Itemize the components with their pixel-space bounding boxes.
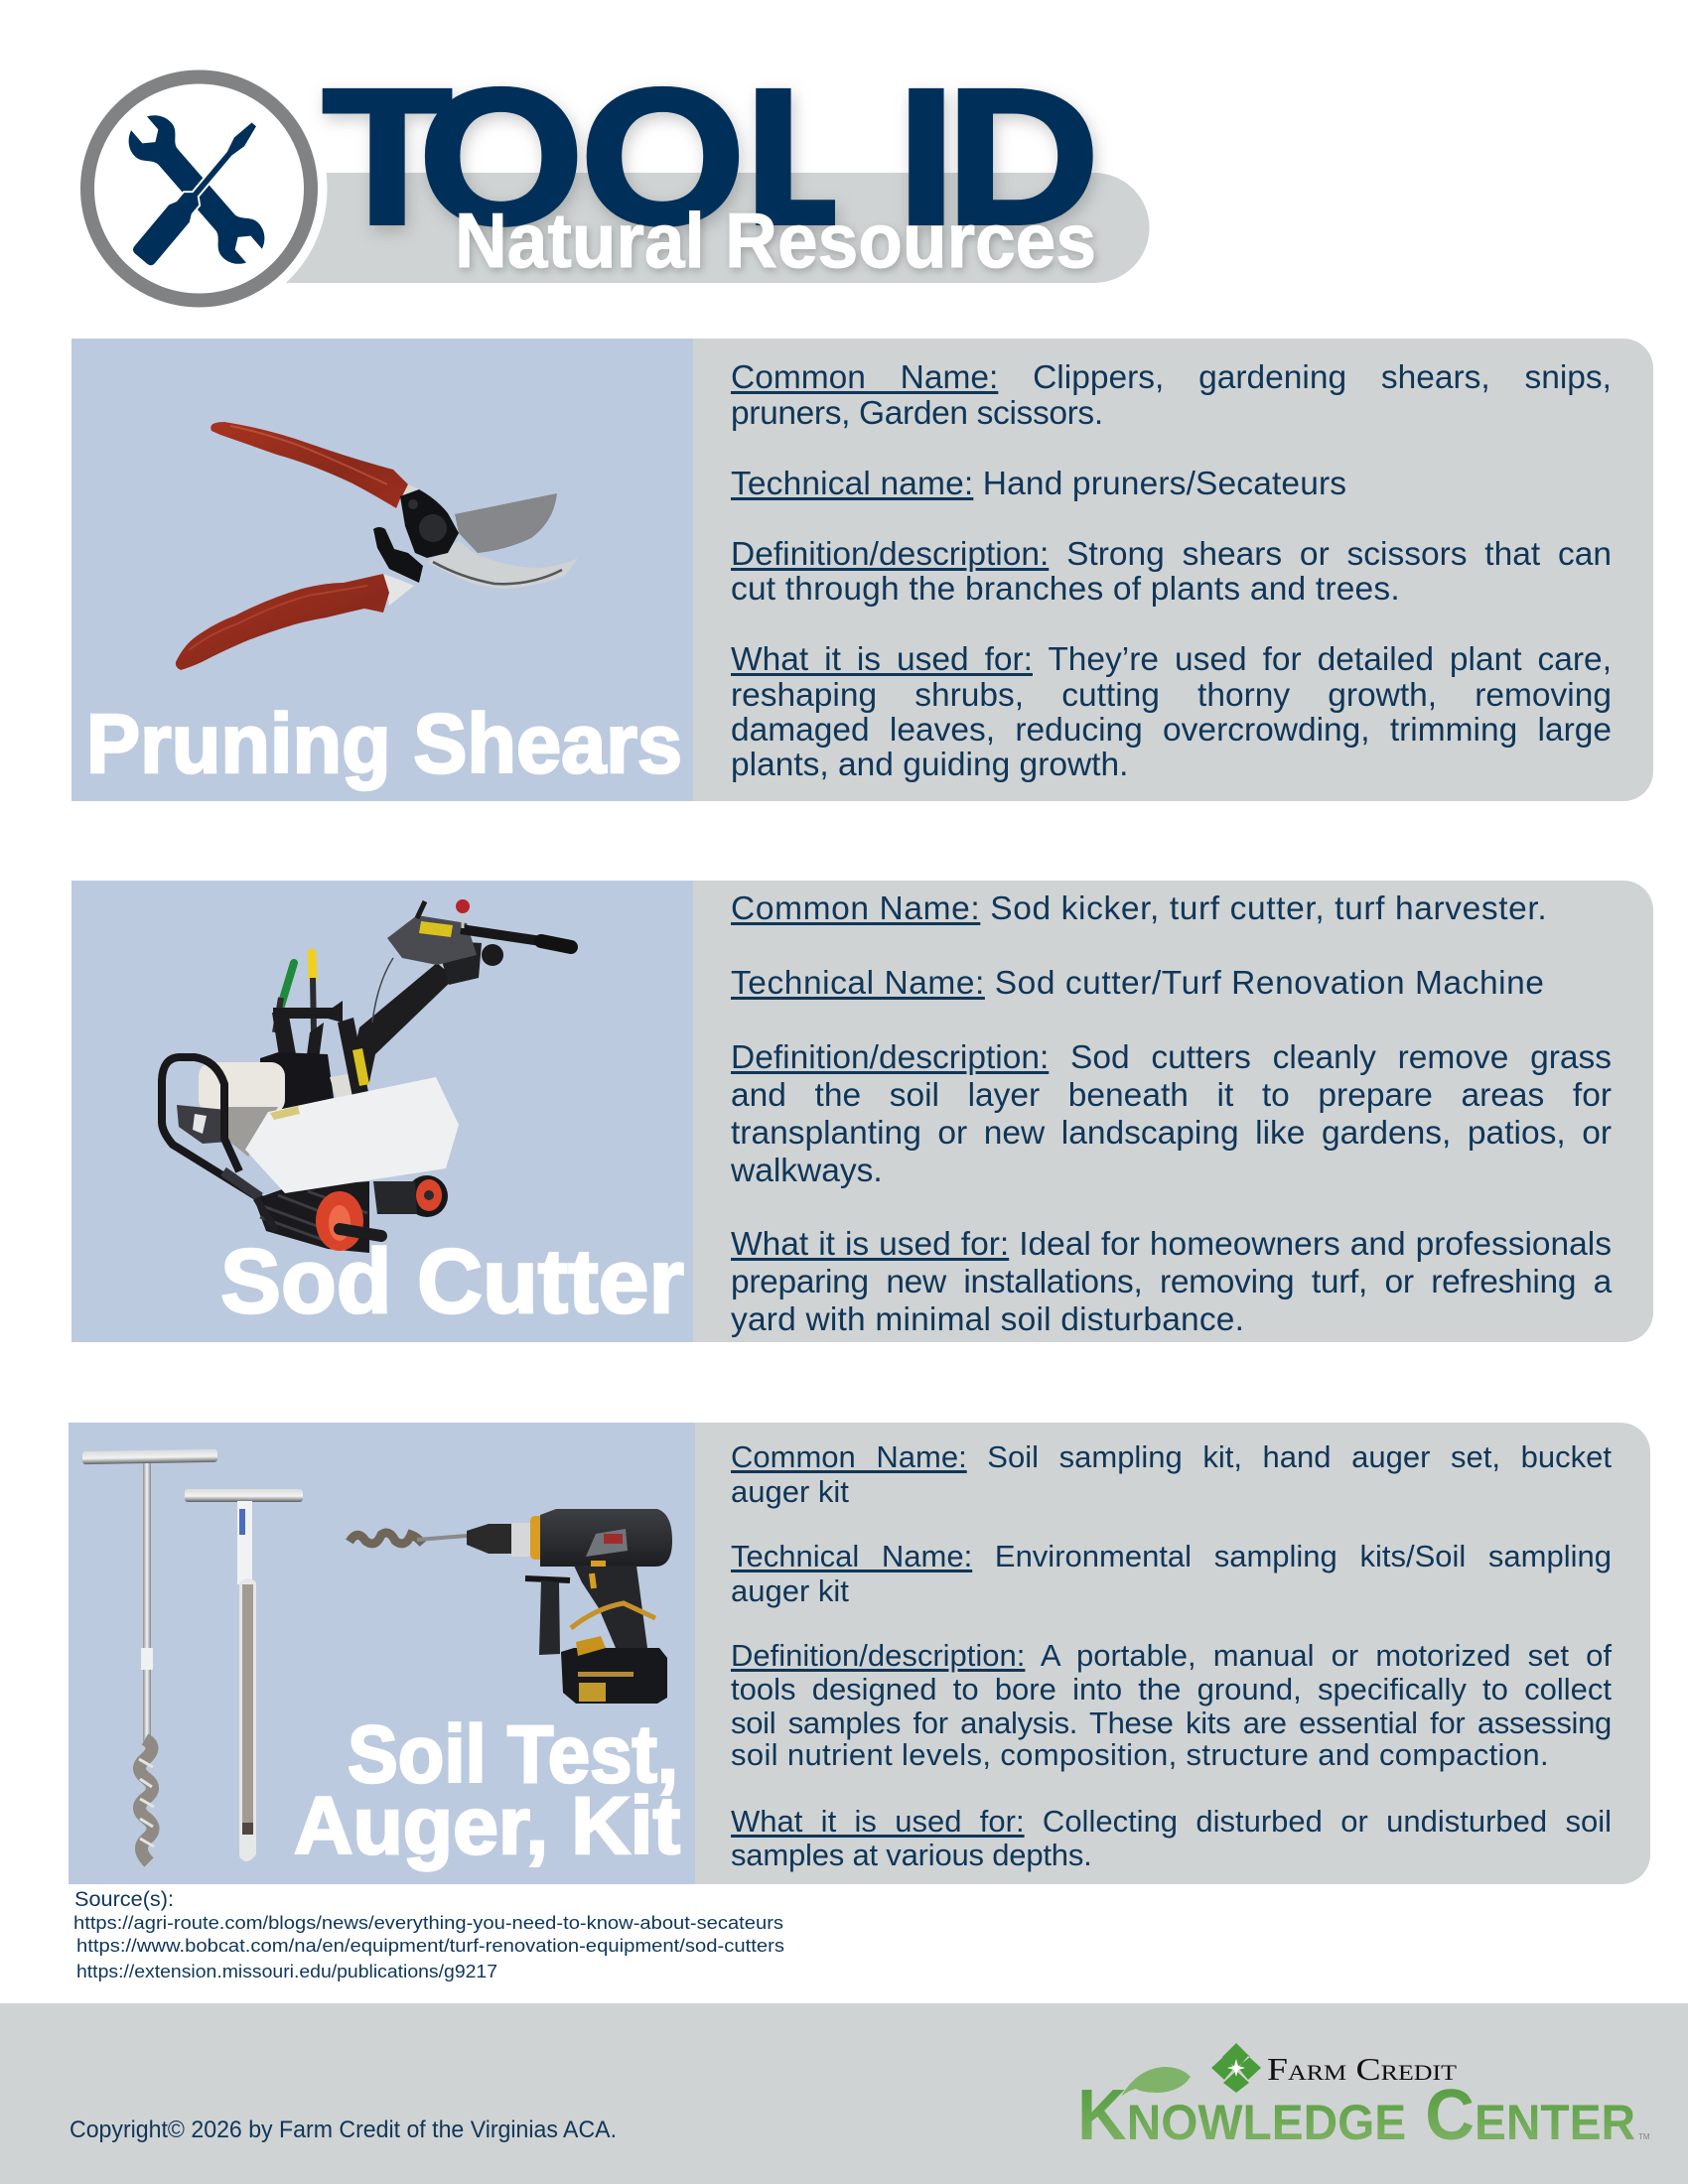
heading: Sod Cutter: Sod Cutter	[220, 1231, 684, 1332]
subtitle: Natural Resources	[455, 197, 1096, 284]
panel: pruning shears	[71, 339, 1653, 801]
text block: soil test details: What it is used for: Collecting disturbed or undisturbed soil	[731, 1804, 1612, 1839]
text block: pruning shears details: plants, and guiding growth.	[731, 747, 1128, 783]
text block: sod cutter details: Definition/description: Sod cutters cleanly remove grass	[731, 1039, 1612, 1076]
heading: Soil Test, Auger, Kit: Soil Test,	[348, 1709, 678, 1800]
logo: Farm Credit Knowledge Center: Knowledge Center	[1077, 2076, 1635, 2155]
text block: soil test details: Common Name: Soil sampling kit, hand auger set, bucket	[731, 1439, 1612, 1474]
panel: sod cutter	[71, 881, 1653, 1342]
heading: Soil Test, Auger, Kit: Auger, Kit	[294, 1781, 680, 1871]
subtitle pill	[278, 173, 1150, 283]
text block: soil test details: auger kit	[731, 1474, 849, 1509]
text block: pruning shears details: What it is used for: They’re used for detailed plant care,	[731, 641, 1612, 678]
text block: sod cutter details: walkways.	[731, 1153, 883, 1189]
sources list: https://agri-route.com/blogs/news/everything-you-need-to-know-about-secateurs	[73, 1913, 783, 1933]
text block: sod cutter details: What it is used for: Ideal for homeowners and professionals	[731, 1226, 1612, 1263]
text block: soil test details: soil samples for analysis. These kits are essential for assessing	[731, 1706, 1612, 1740]
text block: sod cutter details	[731, 890, 1613, 1338]
sources list: Source(s):	[74, 1888, 174, 1911]
image: soil probe	[185, 1489, 303, 1861]
text block: pruning shears details: Common Name: Clippers, gardening shears, snips,	[731, 359, 1612, 396]
icon: crossed wrench and screwdriver badge	[71, 61, 328, 317]
logo: Farm Credit Knowledge Center: TM	[1638, 2132, 1650, 2141]
text block: soil test details	[731, 1439, 1613, 1872]
panel: soil test auger kit	[69, 1423, 1650, 1884]
text block: pruning shears details: pruners, Garden scissors.	[731, 395, 1103, 432]
text block: pruning shears details: reshaping shrubs, cutting thorny growth, removing	[731, 677, 1612, 714]
sources list: https://www.bobcat.com/na/en/equipment/turf-renovation-equipment/sod-cutters	[76, 1936, 784, 1956]
text block: sod cutter details: yard with minimal soil disturbance.	[731, 1301, 1244, 1338]
text block: soil test details: tools designed to bore into the ground, specifically to collect	[731, 1672, 1612, 1706]
text block: soil test details: auger kit	[731, 1573, 849, 1608]
image: cordless drill with auger bit	[350, 1509, 672, 1704]
text block: soil test details: samples at various depths.	[731, 1838, 1092, 1872]
text block: pruning shears details: Definition/description: Strong shears or scissors that can	[731, 536, 1612, 573]
heading: Pruning Shears: Pruning Shears	[86, 697, 682, 790]
text block: sod cutter details: preparing new installations, removing turf, or refreshing a	[731, 1264, 1612, 1300]
heading: Soil Test, Auger, Kit	[294, 1709, 680, 1871]
image: hand auger	[82, 1449, 217, 1862]
text block: pruning shears details	[731, 359, 1612, 783]
sources list	[73, 1888, 784, 1981]
footer band	[0, 2003, 1688, 2184]
text block: sod cutter details: Common Name: Sod kicker, turf cutter, turf harvester.	[731, 890, 1547, 927]
logo: Farm Credit Knowledge Center: Farm Credit	[1267, 2051, 1458, 2087]
text block: soil test details: soil nutrient levels, composition, structure and compaction.	[731, 1737, 1549, 1772]
header: logo badge, title and subtitle	[80, 69, 1150, 308]
logo: Farm Credit Knowledge Center	[1077, 2043, 1650, 2155]
text block: soil test details: Definition/description: A portable, manual or motorized set of	[731, 1638, 1612, 1673]
text block: sod cutter details: Technical Name: Sod cutter/Turf Renovation Machine	[731, 965, 1544, 1002]
sources list: https://extension.missouri.edu/publications/g9217	[76, 1962, 497, 1981]
copyright: Copyright© 2026 by Farm Credit of the Virginias ACA.	[70, 2116, 617, 2143]
text block: sod cutter details: and the soil layer beneath it to prepare areas for	[731, 1077, 1612, 1114]
text block: pruning shears details: damaged leaves, reducing overcrowding, trimming large	[731, 712, 1612, 749]
image: sod cutter machine	[162, 899, 571, 1253]
text block: sod cutter details: transplanting or new landscaping like gardens, patios, or	[731, 1115, 1612, 1152]
text block: pruning shears details: cut through the branches of plants and trees.	[731, 571, 1400, 608]
text block: pruning shears details: Technical name: Hand pruners/Secateurs	[731, 466, 1346, 502]
text block: soil test details: Technical Name: Environmental sampling kits/Soil sampling	[731, 1539, 1612, 1573]
image: pruning shears	[176, 422, 578, 670]
